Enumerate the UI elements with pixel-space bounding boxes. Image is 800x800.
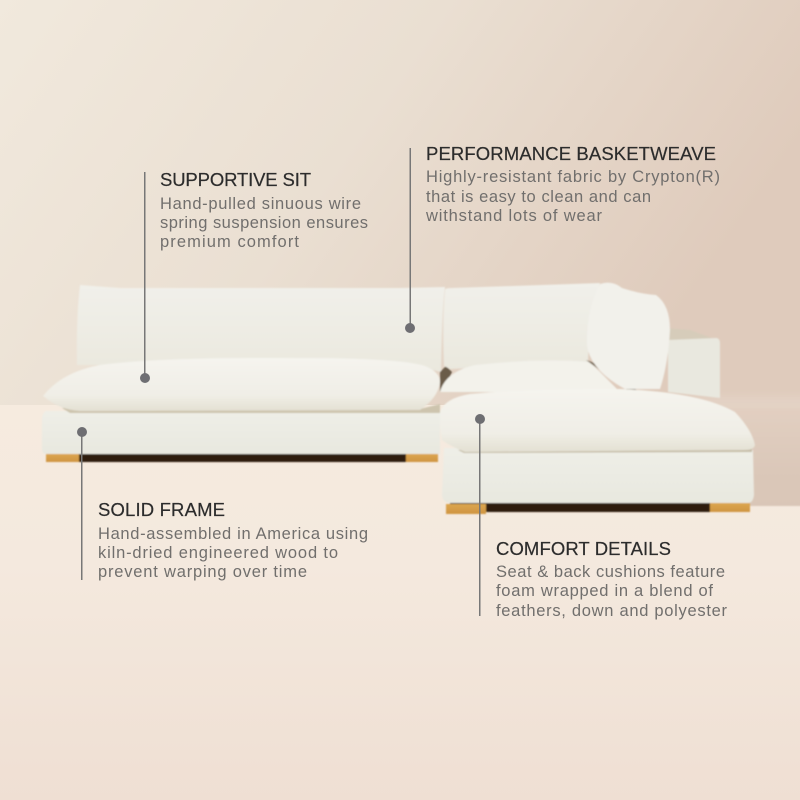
right back cushion: [443, 283, 600, 369]
chaise seat seam: [458, 449, 752, 453]
right arm shadow: [664, 328, 712, 342]
body text: [160, 195, 368, 251]
body text: withstand lots of wear: [425, 207, 602, 225]
chaise cushion: [440, 389, 755, 452]
dark seam behind side cushion: [586, 360, 640, 392]
heading: COMFORT DETAILS: [496, 538, 671, 559]
callout: solid frame: [77, 427, 368, 581]
heading: PERFORMANCE BASKETWEAVE: [426, 143, 716, 164]
gap shadow between modules: [440, 366, 452, 392]
body text: Seat & back cushions feature: [496, 563, 725, 581]
left sofa legs: [46, 454, 438, 462]
body text: spring suspension ensures: [160, 214, 368, 232]
left seat cushion: [43, 358, 440, 411]
heading: SUPPORTIVE SIT: [160, 169, 311, 190]
body text: [496, 563, 728, 620]
left sofa base: [42, 411, 440, 454]
left seat shadow: [62, 404, 440, 413]
body text: Hand-pulled sinuous wire: [160, 195, 361, 213]
body text: kiln-dried engineered wood to: [98, 544, 338, 562]
chaise legs: [446, 503, 750, 514]
leader line and dot: [77, 427, 87, 580]
chaise base: [442, 448, 754, 503]
body text: [98, 525, 368, 581]
right seat behind: [440, 361, 620, 392]
leader line and dot: [475, 414, 485, 616]
callout: performance basketweave: [405, 143, 720, 333]
body text: prevent warping over time: [98, 563, 307, 581]
body text: that is easy to clean and can: [426, 188, 651, 206]
left back cushion: [77, 285, 445, 372]
body text: foam wrapped in a blend of: [496, 582, 713, 600]
callout: comfort details: [475, 414, 728, 620]
body text: Highly-resistant fabric by Crypton(R): [426, 168, 720, 186]
body text: premium comfort: [160, 233, 299, 251]
corner side cushion: [587, 283, 670, 389]
leader line and dot: [405, 148, 415, 333]
body text: Hand-assembled in America using: [98, 525, 368, 543]
leader line and dot: [140, 172, 150, 383]
body text: feathers, down and polyester: [496, 602, 728, 620]
heading: SOLID FRAME: [98, 499, 225, 520]
body text: [425, 168, 720, 225]
callout: supportive sit: [140, 169, 368, 383]
sofa sectional: [42, 283, 755, 514]
right arm: [668, 338, 720, 398]
